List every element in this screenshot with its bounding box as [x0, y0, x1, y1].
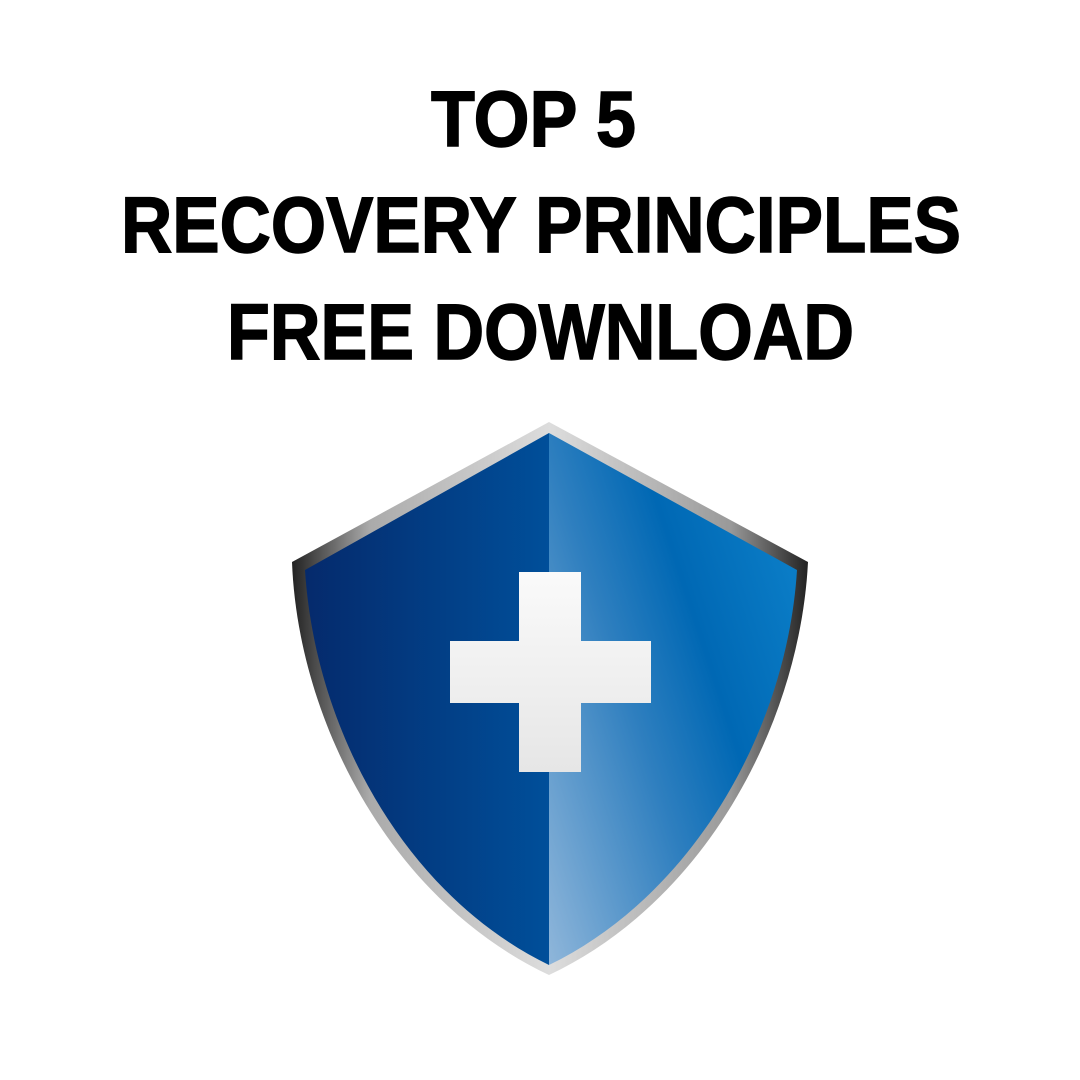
- icon: shield with cross: [292, 422, 808, 975]
- title: [121, 74, 961, 376]
- title: TOP 5: [431, 74, 636, 163]
- title: FREE DOWNLOAD: [227, 287, 854, 376]
- title: RECOVERY PRINCIPLES: [121, 180, 961, 269]
